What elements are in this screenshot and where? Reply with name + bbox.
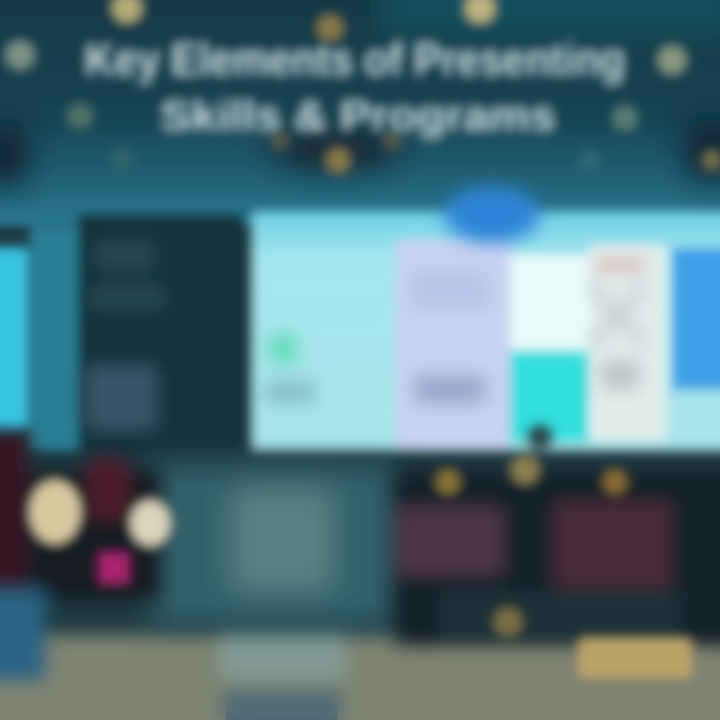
- title: Key Elements of Presenting: [85, 34, 625, 85]
- background: ceiling: [0, 0, 720, 225]
- panel: gold sign: [578, 638, 692, 678]
- ceiling shadows: [0, 0, 720, 187]
- panel: display details: [265, 258, 645, 404]
- icon: cream light globes: [28, 479, 171, 547]
- panel: left screen text blobs: [85, 240, 165, 430]
- icon: ceiling lights: [5, 0, 720, 173]
- panel: left audience: [0, 435, 160, 680]
- icon: magenta accent: [98, 552, 130, 584]
- icon: audience heads: [435, 424, 628, 637]
- icon: blue ceiling banner: [444, 187, 540, 243]
- panel: left screens: [0, 215, 243, 455]
- panel: central podium: [150, 465, 395, 625]
- background: lower hall: [0, 225, 720, 650]
- panel: floor: [0, 632, 720, 720]
- title: [85, 34, 625, 139]
- panel: slate floor edge: [226, 702, 338, 720]
- panel: floor base: [0, 650, 720, 720]
- panel: main display wall: [252, 212, 720, 450]
- panel: right audience seating: [395, 470, 720, 645]
- title: Skills & Programs: [160, 92, 556, 139]
